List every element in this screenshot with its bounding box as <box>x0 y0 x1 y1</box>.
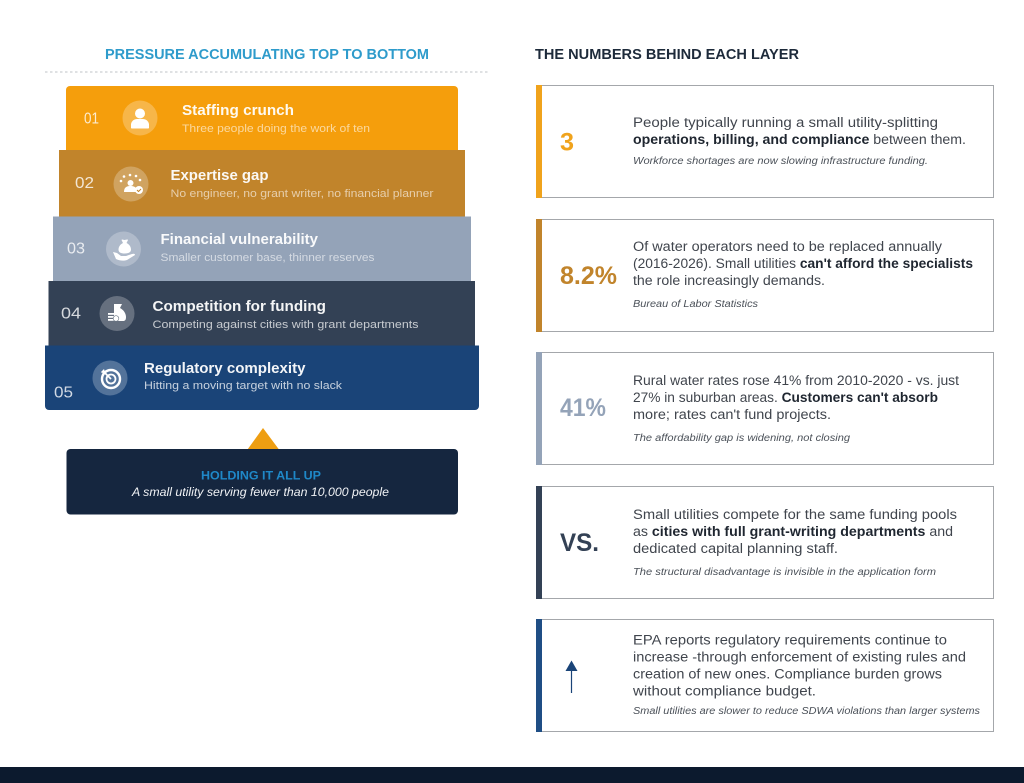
card: regulatory arrow <box>536 619 994 732</box>
layer 04: competition for funding: 04 <box>61 306 81 322</box>
layer 05: regulatory complexity: 05 <box>54 384 73 402</box>
card: 8.2%: (2016-2026). Small utilities can't afford the specialists <box>633 256 973 271</box>
layer 05: regulatory complexity: Hitting a moving target with no slack <box>144 380 343 392</box>
footer band <box>0 767 1024 783</box>
layer 02: expertise gap: No engineer, no grant writer, no financial planner <box>170 188 434 200</box>
card: 41%: 27% in suburban areas. Customers can't absorb <box>633 390 938 405</box>
icon: person <box>122 100 158 136</box>
layer 03: financial vulnerability: Financial vulnerability <box>160 232 318 248</box>
icon: up arrow <box>566 660 578 693</box>
card: 8.2% <box>536 219 994 332</box>
card: regulatory arrow: creation of new ones. Compliance burden grows <box>633 666 942 682</box>
layer 02: expertise gap: 02 <box>75 175 94 192</box>
card: vs.: VS. <box>560 529 599 557</box>
card: 41%: Rural water rates rose 41% from 2010-2020 - vs. just <box>633 373 959 388</box>
card: vs.: The structural disadvantage is invisible in the application form <box>633 567 936 578</box>
layer 04: competition for funding: Competing against cities with grant departments <box>152 319 419 331</box>
icon: hand with money bag <box>106 232 141 266</box>
layer 05: regulatory complexity <box>45 346 479 410</box>
card: regulatory arrow: increase -through enforcement of existing rules and <box>633 650 966 664</box>
card: 41%: The affordability gap is widening, not closing <box>633 433 850 444</box>
card: 8.2%: 8.2% <box>560 262 617 290</box>
panel: holding it all up: HOLDING IT ALL UP <box>201 468 321 482</box>
layer 03: financial vulnerability: Smaller customer base, thinner reserves <box>160 252 375 264</box>
panel: holding it all up: A small utility serving fewer than 10,000 people <box>131 487 389 499</box>
icon: money bag and coins <box>100 296 134 331</box>
card: 8.2%: the role increasingly demands. <box>633 273 825 288</box>
layer 04: competition for funding <box>48 281 475 346</box>
card: 3 people <box>536 85 994 198</box>
layer 01: staffing crunch <box>66 86 458 150</box>
card: 41%: more; rates can't fund projects. <box>633 407 831 422</box>
layer 02: expertise gap <box>59 150 465 216</box>
card: regulatory arrow: without compliance budget. <box>632 684 816 698</box>
icon: target <box>92 360 128 396</box>
layer 01: staffing crunch: Staffing crunch <box>182 103 294 119</box>
card: 41%: 41% <box>560 394 606 422</box>
card: vs. <box>536 486 994 599</box>
card: 3 people: 3 <box>560 128 574 156</box>
layer 03: financial vulnerability <box>53 216 471 282</box>
layer 05: regulatory complexity: Regulatory complexity <box>144 361 306 377</box>
card: 8.2%: Of water operators need to be replaced annually <box>633 239 942 254</box>
card: regulatory arrow: EPA reports regulatory requirements continue to <box>633 632 947 648</box>
panel: pressure stack <box>45 86 479 410</box>
layer 04: competition for funding: Competition for funding <box>152 299 326 315</box>
card: 3 people: operations, billing, and compliance between them. <box>633 132 966 147</box>
card: regulatory arrow: Small utilities are slower to reduce SDWA violations than larger systems <box>633 706 980 717</box>
layer 01: staffing crunch: 01 <box>84 110 99 128</box>
heading: pressure accumulating: PRESSURE ACCUMULATING TOP TO BOTTOM <box>105 47 429 63</box>
card: 3 people: People typically running a small utility-splitting <box>633 115 938 130</box>
layer 03: financial vulnerability: 03 <box>67 240 85 258</box>
layer 01: staffing crunch: Three people doing the work of ten <box>182 123 370 135</box>
card: 3 people: Workforce shortages are now slowing infrastructure funding. <box>633 156 928 167</box>
card: 41% <box>536 352 994 465</box>
card: vs.: dedicated capital planning staff. <box>633 541 838 556</box>
icon: support triangle <box>248 428 279 450</box>
card: vs.: as cities with full grant-writing departments and <box>633 524 953 539</box>
heading: the numbers behind each layer: THE NUMBERS BEHIND EACH LAYER <box>535 47 800 63</box>
layer 02: expertise gap: Expertise gap <box>170 168 269 184</box>
icon: expert group <box>114 166 148 202</box>
card: 8.2%: Bureau of Labor Statistics <box>633 299 758 310</box>
card: vs.: Small utilities compete for the same funding pools <box>633 507 957 522</box>
panel: holding it all up <box>66 449 458 514</box>
